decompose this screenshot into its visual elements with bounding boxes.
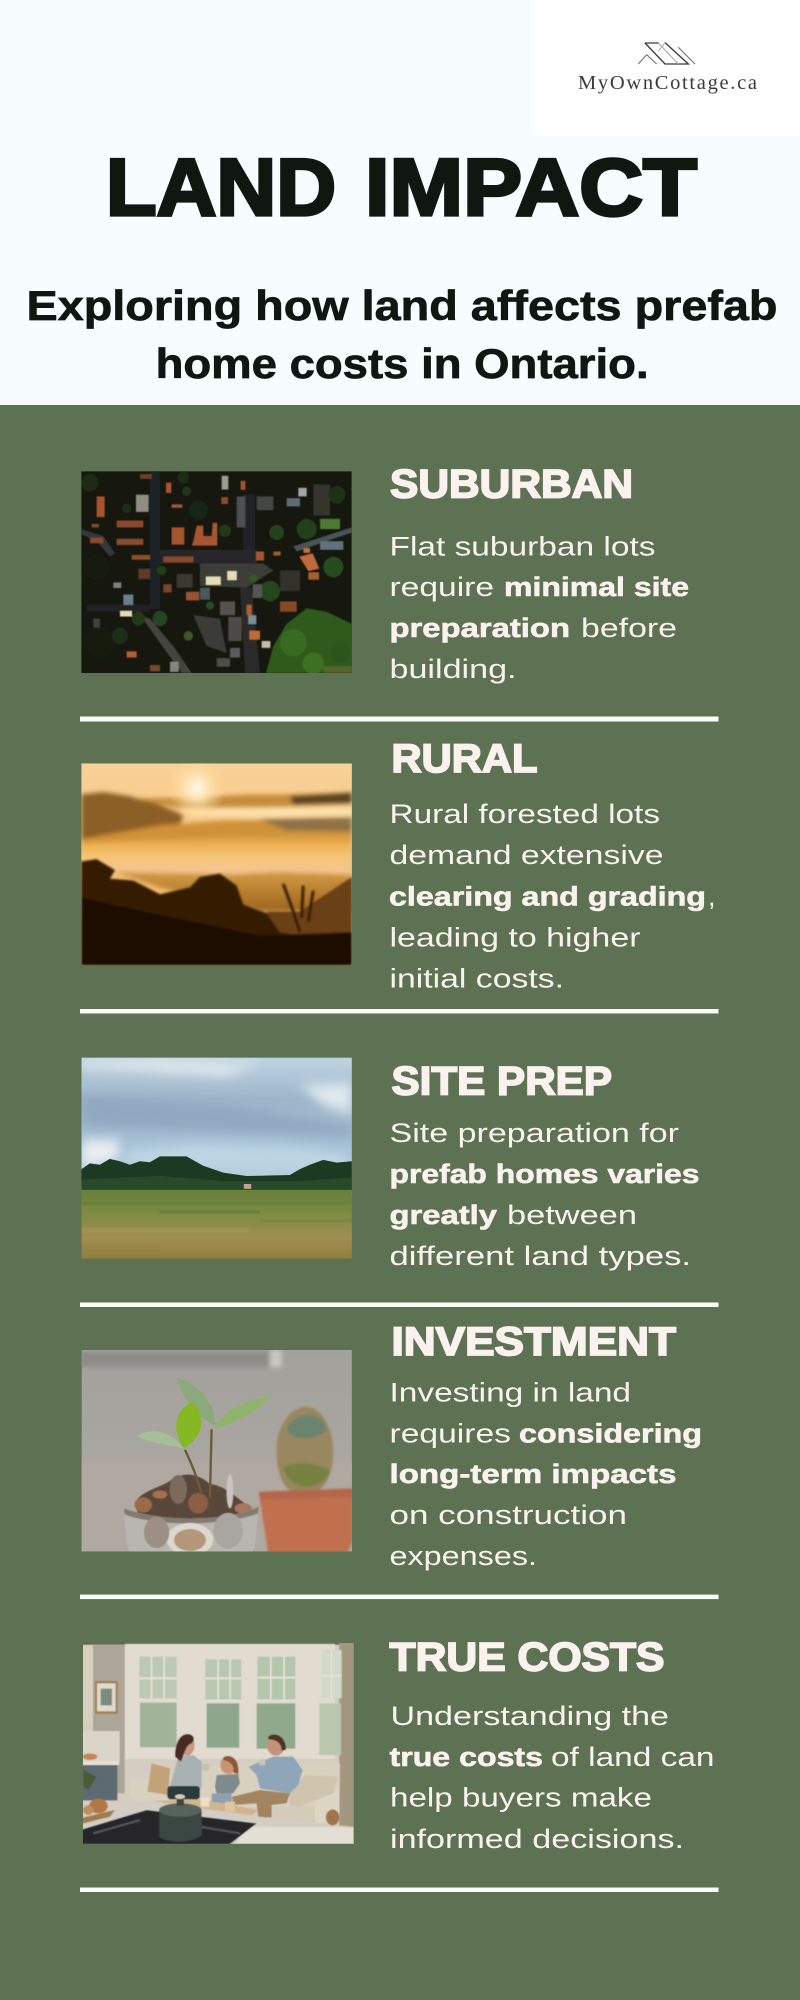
body text: true costs: of land can [551,1742,714,1772]
body text: rural: clearing and grading [389,881,706,911]
body text: suburban: require [390,572,494,602]
body text: rural: leading to higher [390,922,641,952]
body text: investment: considering [519,1418,702,1448]
woman [168,1755,202,1797]
body text: suburban: before [581,613,677,643]
body text: site prep: between [507,1200,637,1230]
body text: suburban [390,531,689,684]
glass with coins [124,1507,259,1553]
kitchen left [80,1731,120,1763]
body text: suburban: preparation [390,613,570,643]
logo icon: roofline [638,42,696,65]
windows [139,1650,342,1755]
pot [159,1810,202,1842]
body text: investment [390,1377,702,1571]
body text: investment: on construction [390,1500,627,1530]
countertop [80,1801,357,1847]
coffee table with mugs [155,1799,258,1817]
body text: suburban: Flat suburban lots [390,531,656,561]
panel: true costs [80,1636,715,1854]
body text: rural: demand extensive [390,840,664,870]
heading: rural: RURAL [392,737,538,781]
title: IMPACT [365,143,697,233]
heading: site prep: SITE PREP [392,1059,612,1103]
subtitle: Exploring how land affects prefab [26,282,778,329]
body text: investment: long-term impacts [390,1459,676,1489]
body text: investment: Investing in land [390,1377,631,1407]
roofs and buildings [90,474,319,671]
body text: rural: Rural forested lots [390,799,660,829]
body text: rural [389,799,716,994]
panel: suburban [81,462,689,684]
heading: investment: INVESTMENT [392,1320,676,1364]
photo: seedling growing from coins [82,1350,352,1552]
logo [535,0,800,136]
subtitle [26,282,778,387]
logo wordmark: MyOwnCottage.ca [578,72,757,94]
body text: rural: initial costs. [390,964,564,994]
subtitle: home costs in Ontario. [156,340,649,387]
title [106,143,697,233]
photo: misty sunrise over forest [81,763,352,966]
body text: true costs: Understanding the [390,1701,669,1731]
body text: site prep: different land types. [390,1241,691,1271]
trees [81,474,99,492]
body text: true costs: help buyers make [390,1783,652,1813]
body text: true costs: informed decisions. [390,1824,684,1854]
header band [0,0,800,405]
body text: suburban: building. [390,654,516,684]
photo: family in bright living room [83,1643,354,1844]
panel: rural [81,737,716,994]
body text: site prep [390,1118,700,1271]
body text: site prep: greatly [390,1200,497,1230]
body text: site prep: Site preparation for [390,1118,679,1148]
body text: true costs: true costs [390,1742,543,1772]
bread basket [80,1810,115,1823]
picture frame [95,1681,118,1714]
body text: site prep: prefab homes varies [390,1159,700,1189]
cactus and pot [259,1407,355,1555]
body text: true costs [390,1701,714,1854]
photo: open field and treeline [82,1058,352,1259]
body text: investment: expenses. [390,1541,537,1571]
stems and leaves [185,1429,212,1498]
green hillside [266,608,352,673]
photo: aerial view of suburb [81,471,352,673]
title: LAND [106,143,336,233]
green background panel [0,405,800,2000]
body text: rural: , [708,881,716,911]
body text: investment: requires [390,1418,511,1448]
heading: suburban: SUBURBAN [390,462,633,506]
coins [124,1474,259,1556]
child [215,1774,240,1793]
stove [80,1810,257,1847]
man [248,1757,303,1793]
panel: investment [78,1320,702,1571]
heading: true costs: TRUE COSTS [390,1636,664,1680]
panel: site prep [82,1058,700,1271]
body text: suburban: minimal site [504,572,689,602]
sofa [131,1763,340,1824]
